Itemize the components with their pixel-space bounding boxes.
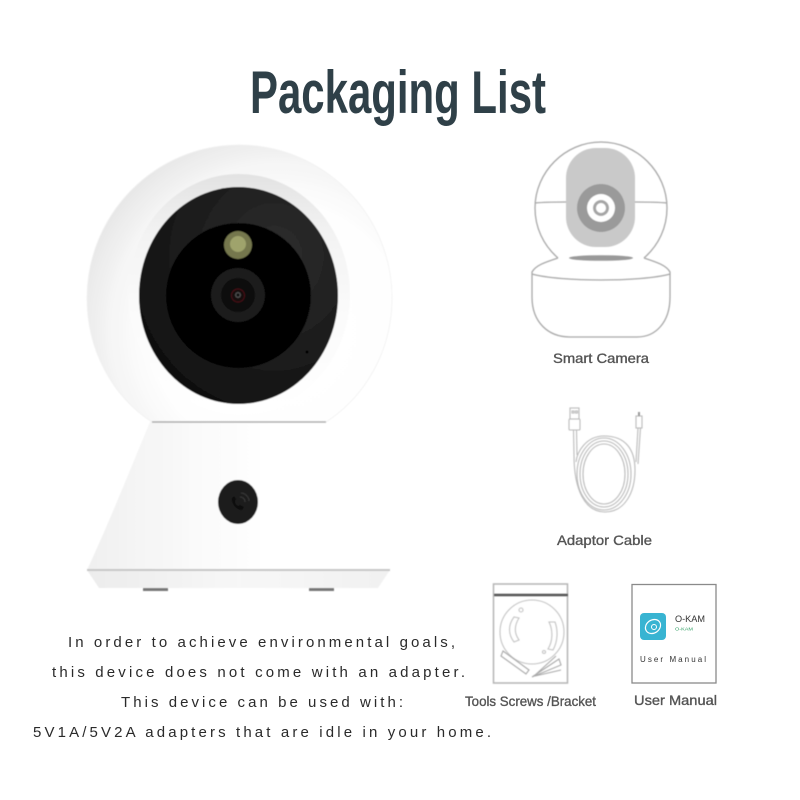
icon: user manual booklet: User Manual <box>640 655 706 664</box>
text block: adapter note: In order to achieve environmental goals, <box>68 634 455 651</box>
label: user manual: User Manual <box>634 692 717 708</box>
icon: user manual booklet: O-KAM <box>675 626 693 632</box>
icon: adaptor cable <box>569 408 642 512</box>
title: Packaging List <box>250 59 546 126</box>
LED light <box>224 231 252 259</box>
lens housing <box>139 187 338 404</box>
icon: tools bag <box>494 584 568 683</box>
call button with phone icon <box>218 480 258 524</box>
text block: adapter note: This device can be used with: <box>121 694 403 711</box>
text block: adapter note <box>33 634 491 741</box>
text block: adapter note: this device does not come with an adapter. <box>52 664 465 681</box>
icon: user manual booklet <box>632 584 716 683</box>
app icon <box>640 613 666 640</box>
camera head sphere <box>87 145 392 422</box>
product photo: white camera <box>87 145 392 591</box>
camera base <box>87 422 390 591</box>
camera lens <box>211 268 265 322</box>
label: adaptor cable: Adaptor Cable <box>557 532 652 548</box>
label: smart camera: Smart Camera <box>553 350 649 366</box>
icon: user manual booklet: O-KAM <box>675 614 705 624</box>
label: tools screws/bracket: Tools Screws /Bracket <box>465 693 596 709</box>
icon: smart camera line drawing <box>532 142 670 337</box>
text block: adapter note: 5V1A/5V2A adapters that are idle in your home. <box>33 724 491 741</box>
